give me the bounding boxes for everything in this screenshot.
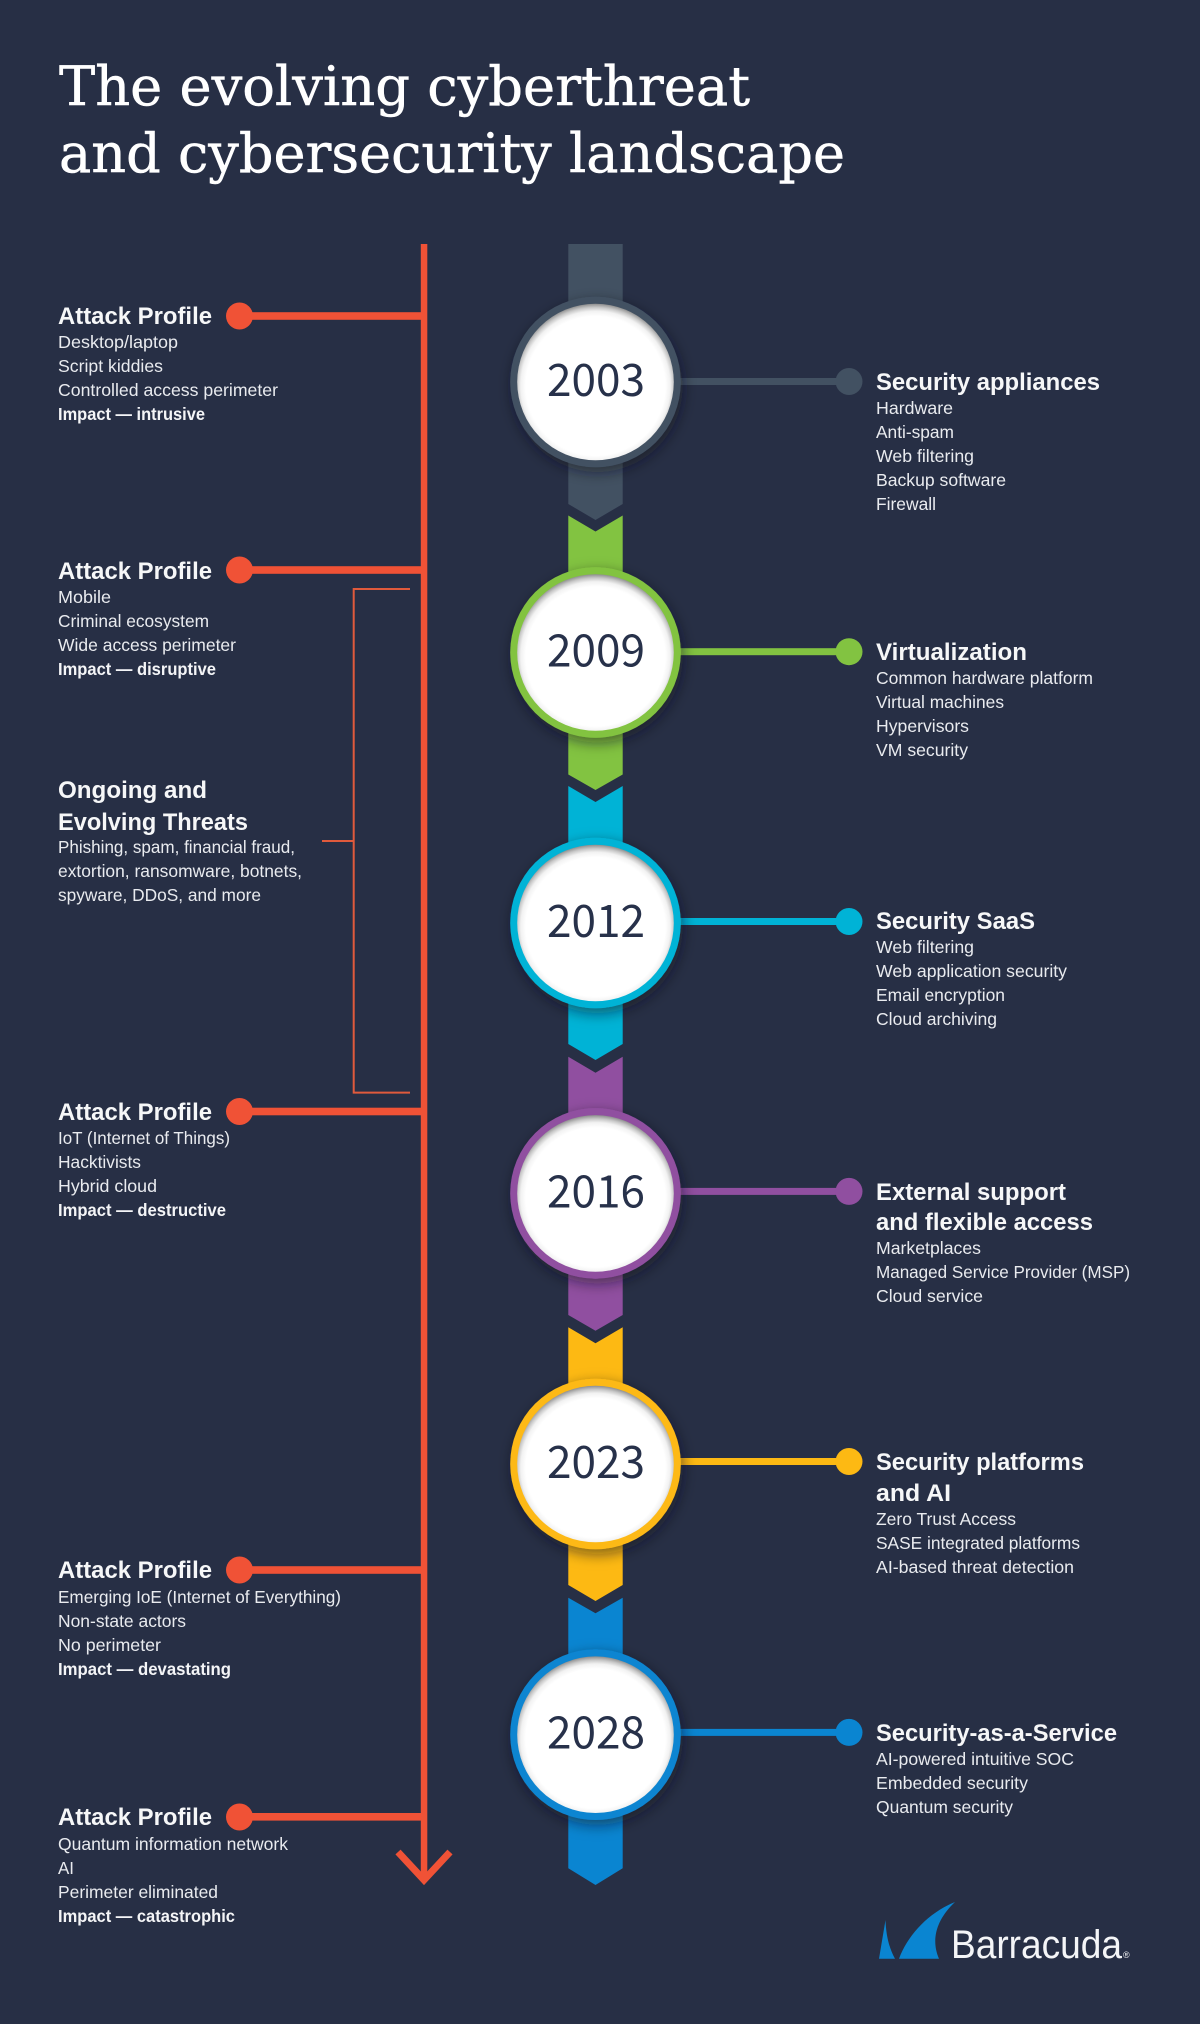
milestone: 2003 security appliances bbox=[510, 244, 1100, 520]
panel: attack profile 2023 bbox=[58, 1556, 424, 1679]
milestone: 2023 security platforms and ai bbox=[510, 1327, 1084, 1601]
panel: attack profile 2028: Attack Profile bbox=[58, 1804, 212, 1831]
milestone: 2003 security appliances: Anti-spam bbox=[876, 422, 954, 442]
milestone: 2016 external support: External support bbox=[876, 1179, 1066, 1206]
logo: barracuda: ® bbox=[1123, 1950, 1130, 1960]
panel: attack profile 2016: IoT (Internet of Things) bbox=[58, 1128, 230, 1148]
milestone: 2012 security saas: Security SaaS bbox=[876, 908, 1035, 935]
threat timeline arrow bbox=[398, 244, 450, 1880]
panel: attack profile 2003: Script kiddies bbox=[58, 356, 163, 376]
title: The evolving cyberthreat bbox=[59, 55, 750, 118]
panel: attack profile 2016 bbox=[58, 1098, 424, 1220]
milestone: 2003 security appliances: Web filtering bbox=[876, 446, 974, 466]
milestone: 2016 external support: and flexible access bbox=[876, 1209, 1093, 1236]
panel: attack profile 2009: Criminal ecosystem bbox=[58, 611, 209, 631]
milestone: 2028 security-as-a-service: AI-powered intuitive SOC bbox=[876, 1749, 1074, 1769]
panel: attack profile 2023: Non-state actors bbox=[58, 1611, 186, 1631]
milestone: 2009 virtualization: Virtual machines bbox=[876, 692, 1004, 712]
milestone: 2028 security-as-a-service: Quantum security bbox=[876, 1797, 1013, 1817]
panel: ongoing and evolving threats: extortion, ransomware, botnets, bbox=[58, 861, 302, 881]
panel: attack profile 2003: Controlled access perimeter bbox=[58, 380, 278, 400]
milestone: 2012 security saas: Cloud archiving bbox=[876, 1009, 997, 1029]
milestone: 2023 security platforms and ai: Zero Trust Access bbox=[876, 1509, 1016, 1529]
panel: attack profile 2009: Wide access perimeter bbox=[58, 635, 236, 655]
milestone: 2012 security saas: Web filtering bbox=[876, 937, 974, 957]
milestone: 2012 security saas: 2012 bbox=[547, 885, 645, 950]
milestone: 2009 virtualization: Common hardware platform bbox=[876, 668, 1093, 688]
milestone: 2028 security-as-a-service bbox=[510, 1598, 1117, 1885]
panel: attack profile 2028: AI bbox=[58, 1858, 74, 1878]
panel: attack profile 2016: Hacktivists bbox=[58, 1152, 141, 1172]
panel: ongoing and evolving threats: Ongoing and bbox=[58, 777, 207, 804]
panel: attack profile 2016: Attack Profile bbox=[58, 1099, 212, 1126]
panel: attack profile 2023: Attack Profile bbox=[58, 1557, 212, 1584]
milestone: 2023 security platforms and ai: and AI bbox=[876, 1480, 951, 1507]
milestone: 2009 virtualization: Hypervisors bbox=[876, 716, 969, 736]
milestone: 2012 security saas bbox=[510, 786, 1067, 1060]
panel: attack profile 2009 bbox=[58, 556, 424, 679]
milestone: 2009 virtualization: 2009 bbox=[547, 614, 645, 680]
milestone: 2009 virtualization bbox=[510, 516, 1093, 790]
milestone: 2003 security appliances: 2003 bbox=[547, 344, 645, 409]
milestone: 2016 external support: Managed Service Provider (MSP) bbox=[876, 1262, 1130, 1282]
panel: attack profile 2028: Perimeter eliminated bbox=[58, 1882, 218, 1902]
panel: attack profile 2023: Emerging IoE (Internet of Everything) bbox=[58, 1587, 341, 1607]
panel: ongoing and evolving threats: spyware, DDoS, and more bbox=[58, 885, 261, 905]
title: and cybersecurity landscape bbox=[59, 122, 845, 185]
panel: attack profile 2009: Impact — disruptive bbox=[58, 659, 216, 679]
panel: ongoing and evolving threats: Phishing, spam, financial fraud, bbox=[58, 837, 295, 857]
milestone: 2003 security appliances: Backup software bbox=[876, 470, 1006, 490]
panel: attack profile 2023: Impact — devastating bbox=[58, 1659, 231, 1679]
milestone: 2028 security-as-a-service: Security-as-a-Service bbox=[876, 1720, 1117, 1747]
milestone: 2012 security saas: Email encryption bbox=[876, 985, 1005, 1005]
panel: attack profile 2003: Desktop/laptop bbox=[58, 332, 178, 352]
panel: attack profile 2028: Impact — catastrophic bbox=[58, 1906, 235, 1926]
milestone: 2003 security appliances: Hardware bbox=[876, 398, 953, 418]
milestone: 2016 external support: Marketplaces bbox=[876, 1238, 981, 1258]
milestone: 2023 security platforms and ai: 2023 bbox=[547, 1426, 645, 1491]
milestone: 2012 security saas: Web application security bbox=[876, 961, 1067, 981]
milestone: 2016 external support bbox=[510, 1057, 1130, 1331]
panel: attack profile 2009: Attack Profile bbox=[58, 558, 212, 585]
bracket: ongoing threats bbox=[322, 589, 410, 1093]
milestone: 2016 external support: Cloud service bbox=[876, 1286, 983, 1306]
milestone: 2028 security-as-a-service: Embedded security bbox=[876, 1773, 1028, 1793]
milestone: 2023 security platforms and ai: SASE integrated platforms bbox=[876, 1533, 1080, 1553]
panel: attack profile 2003: Attack Profile bbox=[58, 303, 212, 330]
logo: barracuda: Barracuda bbox=[951, 1923, 1123, 1967]
panel: attack profile 2016: Impact — destructive bbox=[58, 1200, 226, 1220]
panel: attack profile 2028: Quantum information network bbox=[58, 1834, 288, 1854]
milestone: 2009 virtualization: VM security bbox=[876, 740, 968, 760]
logo: barracuda bbox=[879, 1902, 1130, 1967]
milestone: 2009 virtualization: Virtualization bbox=[876, 639, 1027, 666]
milestone: 2003 security appliances: Security appliances bbox=[876, 369, 1100, 396]
milestone: 2023 security platforms and ai: Security platforms bbox=[876, 1449, 1084, 1476]
title bbox=[59, 55, 845, 185]
panel: ongoing and evolving threats: Evolving Threats bbox=[58, 809, 248, 836]
milestone: 2003 security appliances: Firewall bbox=[876, 494, 936, 514]
panel: attack profile 2003 bbox=[58, 302, 424, 424]
panel: ongoing and evolving threats bbox=[58, 777, 302, 905]
milestone: 2023 security platforms and ai: AI-based threat detection bbox=[876, 1557, 1074, 1577]
panel: attack profile 2028 bbox=[58, 1804, 424, 1926]
panel: attack profile 2003: Impact — intrusive bbox=[58, 404, 205, 424]
panel: attack profile 2023: No perimeter bbox=[58, 1635, 161, 1655]
panel: attack profile 2009: Mobile bbox=[58, 587, 111, 607]
milestone: 2016 external support: 2016 bbox=[547, 1156, 645, 1220]
milestone: 2028 security-as-a-service: 2028 bbox=[547, 1697, 645, 1762]
panel: attack profile 2016: Hybrid cloud bbox=[58, 1176, 157, 1196]
